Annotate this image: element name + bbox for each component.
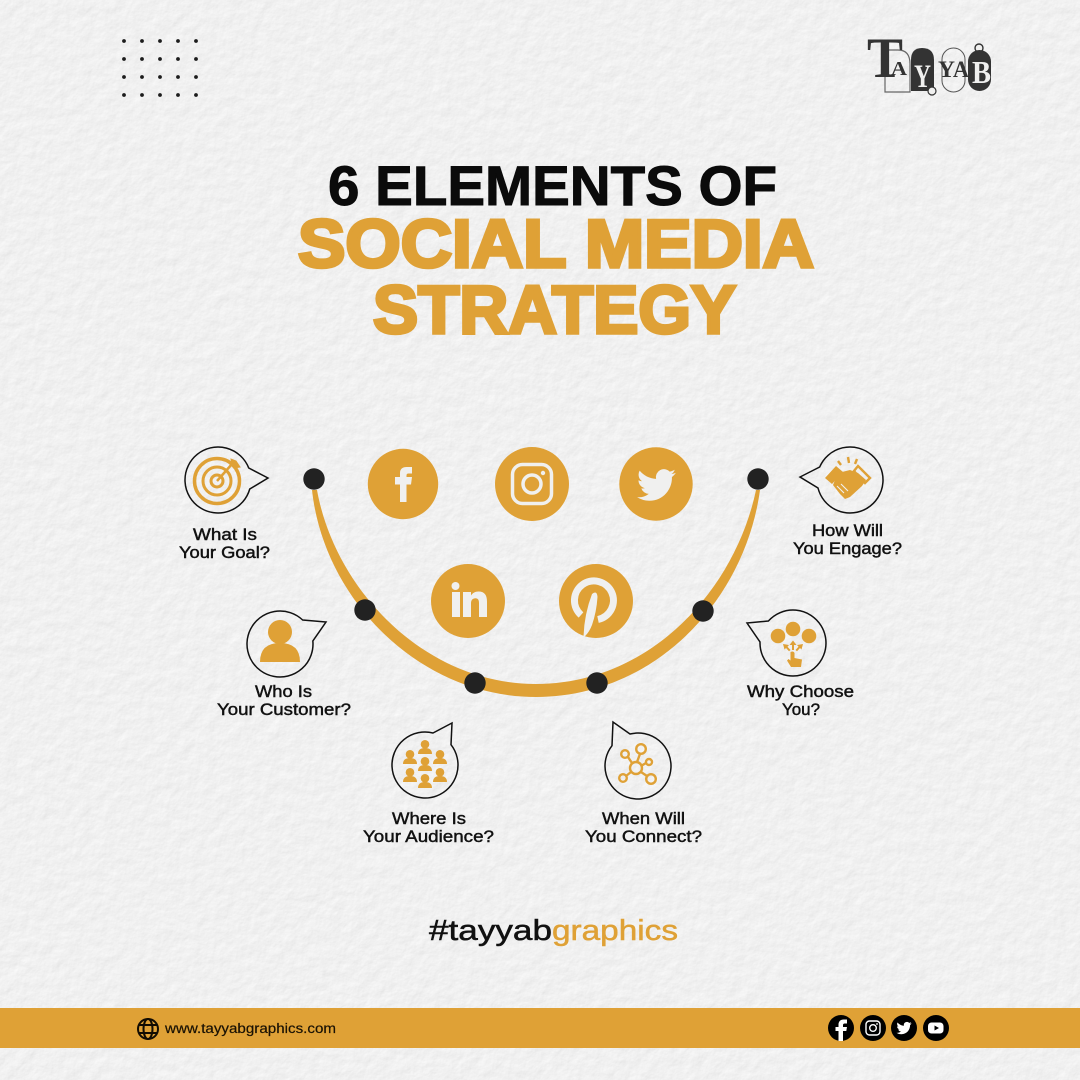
hashtag: graphics: graphics: [552, 915, 678, 947]
callout: how will you engage: [793, 447, 902, 558]
title line: 6 elements of: 6 ELEMENTS OF: [328, 154, 777, 217]
callout: what is your goal: [179, 447, 270, 562]
callout: why choose you: [747, 610, 854, 719]
logo: Tayyab: T: [867, 27, 903, 90]
title line: strategy: STRATEGY: [373, 272, 736, 348]
label: What Is: [193, 526, 257, 544]
bubble and target icon: [185, 447, 268, 513]
callout: when will you connect: [585, 722, 702, 846]
label: Your Goal?: [179, 544, 270, 562]
icon: twitter: [619, 447, 693, 521]
title line: social media: SOCIAL MEDIA: [298, 206, 814, 282]
label: Who Is: [255, 683, 312, 701]
curved timeline: [303, 468, 769, 697]
icon: footer twitter: [891, 1015, 917, 1041]
bubble and handshake icon: [800, 447, 883, 513]
label: Why Choose: [747, 683, 854, 701]
label: Your Audience?: [363, 828, 494, 846]
logo: Tayyab: [867, 27, 991, 95]
hashtag: #tayyab: [429, 915, 552, 947]
label: Where Is: [392, 810, 466, 828]
label: How Will: [812, 522, 883, 540]
icon: footer facebook: [828, 1015, 854, 1041]
callout: who is your customer: [217, 611, 351, 719]
icon: instagram: [495, 447, 569, 521]
label: Your Customer?: [217, 701, 351, 719]
logo: Tayyab: A: [953, 57, 969, 82]
footer bar: [0, 1008, 1080, 1048]
bubble and network icon: [605, 722, 671, 799]
icon: facebook: [368, 449, 438, 519]
label: You?: [782, 701, 820, 719]
icon: globe: [138, 1019, 158, 1039]
bubble and audience icon: [392, 723, 458, 798]
icon: linkedin: [431, 564, 505, 638]
label: You Engage?: [793, 540, 902, 558]
label: When Will: [602, 810, 685, 828]
logo: Tayyab: B: [972, 54, 991, 90]
logo: Tayyab: A: [891, 58, 908, 80]
icon: pinterest: [559, 564, 633, 638]
logo: Tayyab: Y: [914, 59, 931, 95]
label: You Connect?: [585, 828, 702, 846]
website: www.tayyabgraphics.com: [164, 1021, 336, 1036]
decorative dot grid: [122, 39, 198, 97]
logo: Tayyab: Y: [938, 57, 955, 82]
bubble and choice icon: [747, 610, 826, 676]
title: [298, 154, 814, 348]
bubble and person icon: [247, 611, 326, 677]
icon: footer youtube: [923, 1015, 949, 1041]
callout: where is your audience: [363, 723, 494, 846]
icon: footer instagram: [860, 1015, 886, 1041]
